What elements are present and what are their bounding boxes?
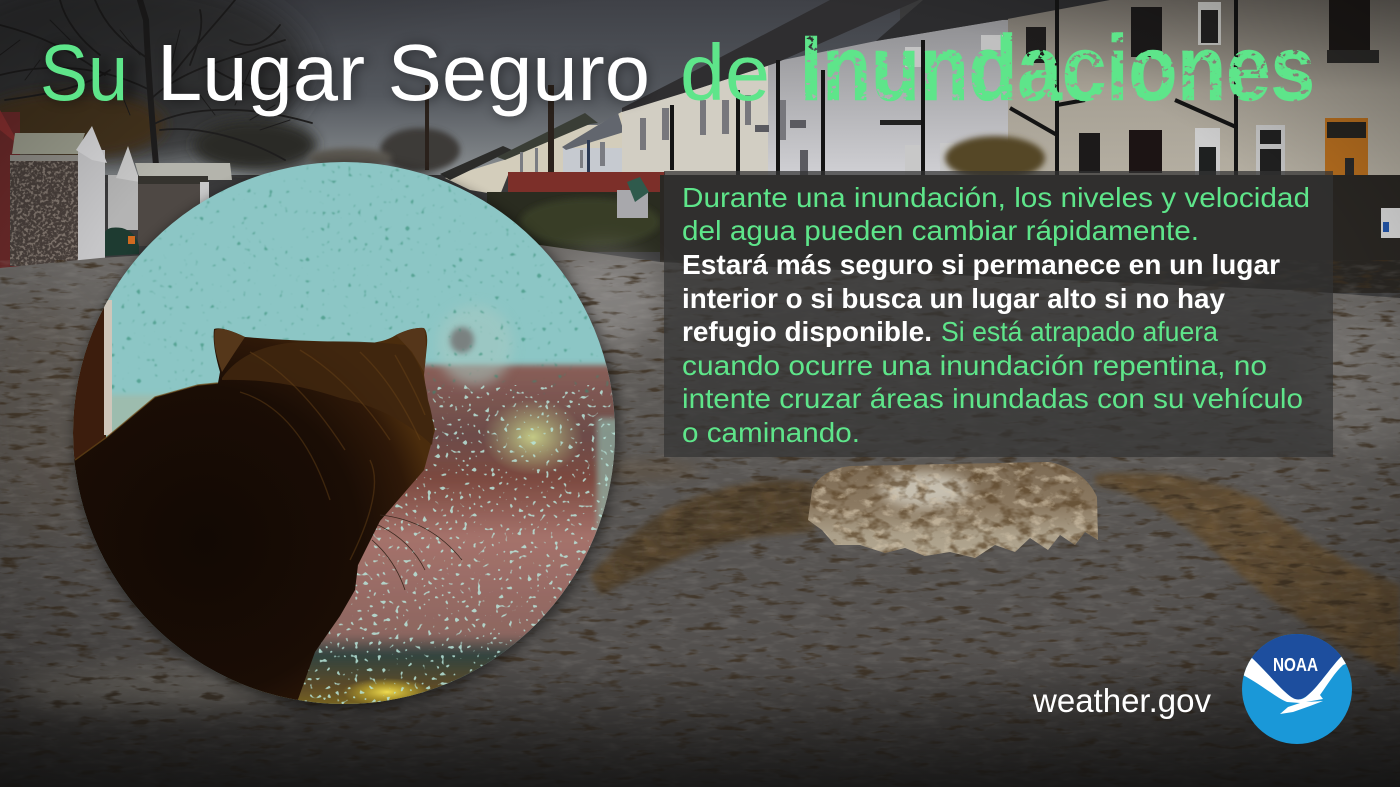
title word: Inundaciones (distressed): Inundaciones <box>800 16 1315 120</box>
warning text: Si está atrapado afuera <box>941 316 1218 347</box>
title word: Su: Su <box>40 28 128 117</box>
left trees <box>0 0 460 172</box>
title: Su Lugar Seguro <box>40 28 650 117</box>
title word: de: de <box>680 28 770 117</box>
warning text: intente cruzar áreas inundadas con su vehículo <box>682 383 1303 414</box>
left sheds and car <box>0 110 232 277</box>
brown current left of surge <box>589 478 818 596</box>
intro text: Durante una inundación, los niveles y velocidad <box>682 182 1310 213</box>
circular photo: cat looking out a rainy window <box>60 160 622 710</box>
water surge foam <box>808 462 1098 558</box>
logo wordmark: NOAA <box>1273 655 1318 675</box>
intro text: del agua pueden cambiar rápidamente. <box>682 215 1199 246</box>
website label: weather.gov <box>1032 682 1211 719</box>
bold safety text <box>682 249 1280 347</box>
warning text: cuando ocurre una inundación repentina, no <box>682 350 1267 381</box>
window frame <box>70 300 112 470</box>
poles <box>425 85 554 240</box>
brown current right of surge <box>1090 460 1400 680</box>
rainy window glass <box>70 160 622 710</box>
warning text: o caminando. <box>682 417 860 448</box>
icon: NOAA logo <box>1242 634 1352 744</box>
cat silhouette <box>60 328 462 710</box>
windows, door and drainpipes <box>672 0 1379 180</box>
bold safety text: interior o si busca un lugar alto si no hay <box>682 283 1225 314</box>
sky <box>0 0 900 175</box>
bold safety text: Estará más seguro si permanece en un lugar <box>682 249 1280 280</box>
intro text <box>682 182 1310 246</box>
flood water <box>0 238 1400 787</box>
red fence and garden <box>487 172 667 252</box>
bush <box>945 136 1045 180</box>
bold safety text: refugio disponible. <box>682 316 932 347</box>
title words: Lugar Seguro: Lugar Seguro <box>157 28 650 117</box>
title <box>40 16 1315 120</box>
warning text <box>682 316 1303 448</box>
text panel <box>664 171 1333 457</box>
far cream houses <box>440 110 625 195</box>
white terrace row <box>622 0 1400 180</box>
hedge behind panel and right dark fence <box>660 175 1400 293</box>
